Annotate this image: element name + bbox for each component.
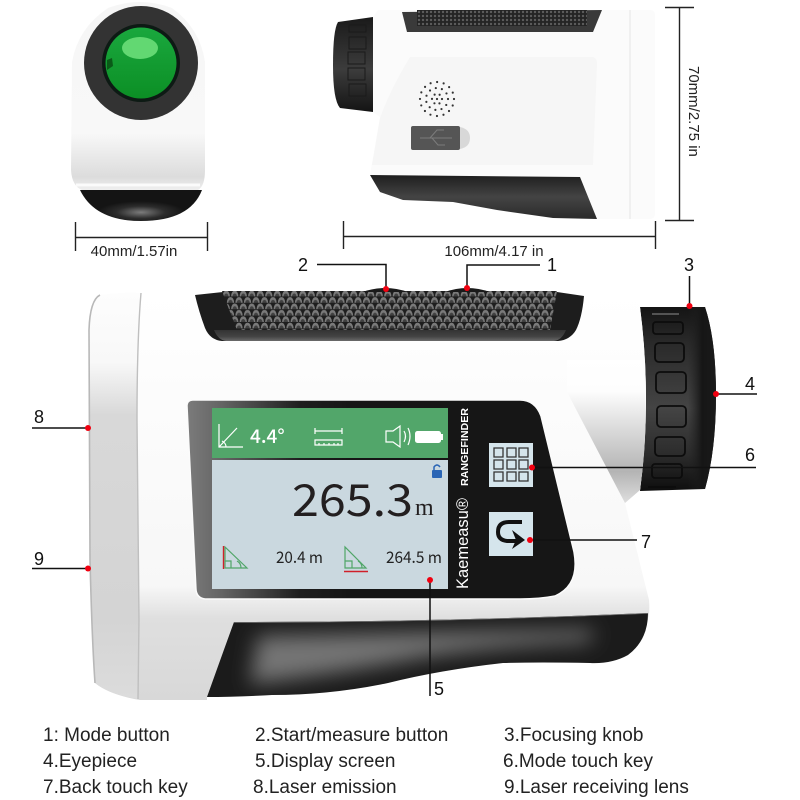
icon: speaker <box>386 426 410 447</box>
screen status bar: 4.4° <box>250 422 285 449</box>
callout numbers <box>34 255 755 699</box>
black control panel <box>187 400 575 599</box>
callout numbers: 4 <box>745 374 755 394</box>
side view top grip <box>402 10 602 32</box>
brand text <box>454 408 472 589</box>
main device <box>89 288 716 703</box>
callout numbers: 7 <box>641 532 651 552</box>
icon: unlocked padlock <box>432 465 442 478</box>
left end cap <box>89 293 141 699</box>
lower hand grip <box>207 613 648 697</box>
front view of device <box>71 2 205 221</box>
legend list: 8.Laser emission <box>253 777 397 798</box>
top knurled grip <box>195 288 584 341</box>
screen measurement area: 20.4 m <box>276 544 323 568</box>
callout numbers: 3 <box>684 255 694 275</box>
screen status bar <box>212 408 448 458</box>
callout numbers: 5 <box>434 679 444 699</box>
back touch key <box>489 512 533 556</box>
eyepiece focusing ring <box>640 307 716 491</box>
callout numbers: 6 <box>745 445 755 465</box>
dimension: length 106mm <box>343 221 656 260</box>
neck shading <box>567 360 646 503</box>
legend list: 5.Display screen <box>255 751 395 772</box>
callout numbers: 1 <box>547 255 557 275</box>
icon: speaker holes <box>420 82 454 116</box>
screen measurement area: m <box>415 495 434 521</box>
side view lower grip <box>370 175 597 219</box>
icon: USB cover <box>411 126 470 150</box>
brand text: RANGEFINDER <box>459 408 471 486</box>
icon: front eyepiece lens <box>84 6 198 120</box>
legend list: 1: Mode button <box>43 725 170 746</box>
brand text: Kaemeasu® <box>454 498 472 589</box>
side view eyepiece ring <box>333 17 373 112</box>
dimension: height 70mm <box>665 7 702 220</box>
icon: battery <box>415 431 443 443</box>
dimension: height 70mm: 70mm/2.75 in <box>685 66 702 157</box>
callout numbers: 9 <box>34 549 44 569</box>
main distance reading: 265.3 <box>292 465 413 529</box>
side view of device <box>333 10 655 219</box>
mode touch key <box>489 443 533 487</box>
legend list: 2.Start/measure button <box>255 725 448 746</box>
legend list: 9.Laser receiving lens <box>504 777 689 798</box>
icon: angle <box>219 424 243 447</box>
main body shell <box>89 293 649 700</box>
callout lines and markers <box>32 264 757 696</box>
legend list <box>43 725 689 798</box>
screen measurement area <box>212 460 448 589</box>
icon: ground distance triangle <box>345 547 366 568</box>
legend list: 4.Eyepiece <box>43 751 137 772</box>
legend list: 6.Mode touch key <box>503 751 653 772</box>
legend list: 7.Back touch key <box>43 777 188 798</box>
legend list: 3.Focusing knob <box>504 725 643 746</box>
icon: height triangle <box>225 547 247 568</box>
callout numbers: 8 <box>34 407 44 427</box>
dimension: width 40mm: 40mm/1.57in <box>91 243 177 260</box>
icon: ruler <box>315 428 342 445</box>
dimension: length 106mm: 106mm/4.17 in <box>444 243 544 260</box>
screen measurement area: 264.5 m <box>386 544 442 568</box>
callout numbers: 2 <box>298 255 308 275</box>
dimension: width 40mm <box>75 222 208 260</box>
